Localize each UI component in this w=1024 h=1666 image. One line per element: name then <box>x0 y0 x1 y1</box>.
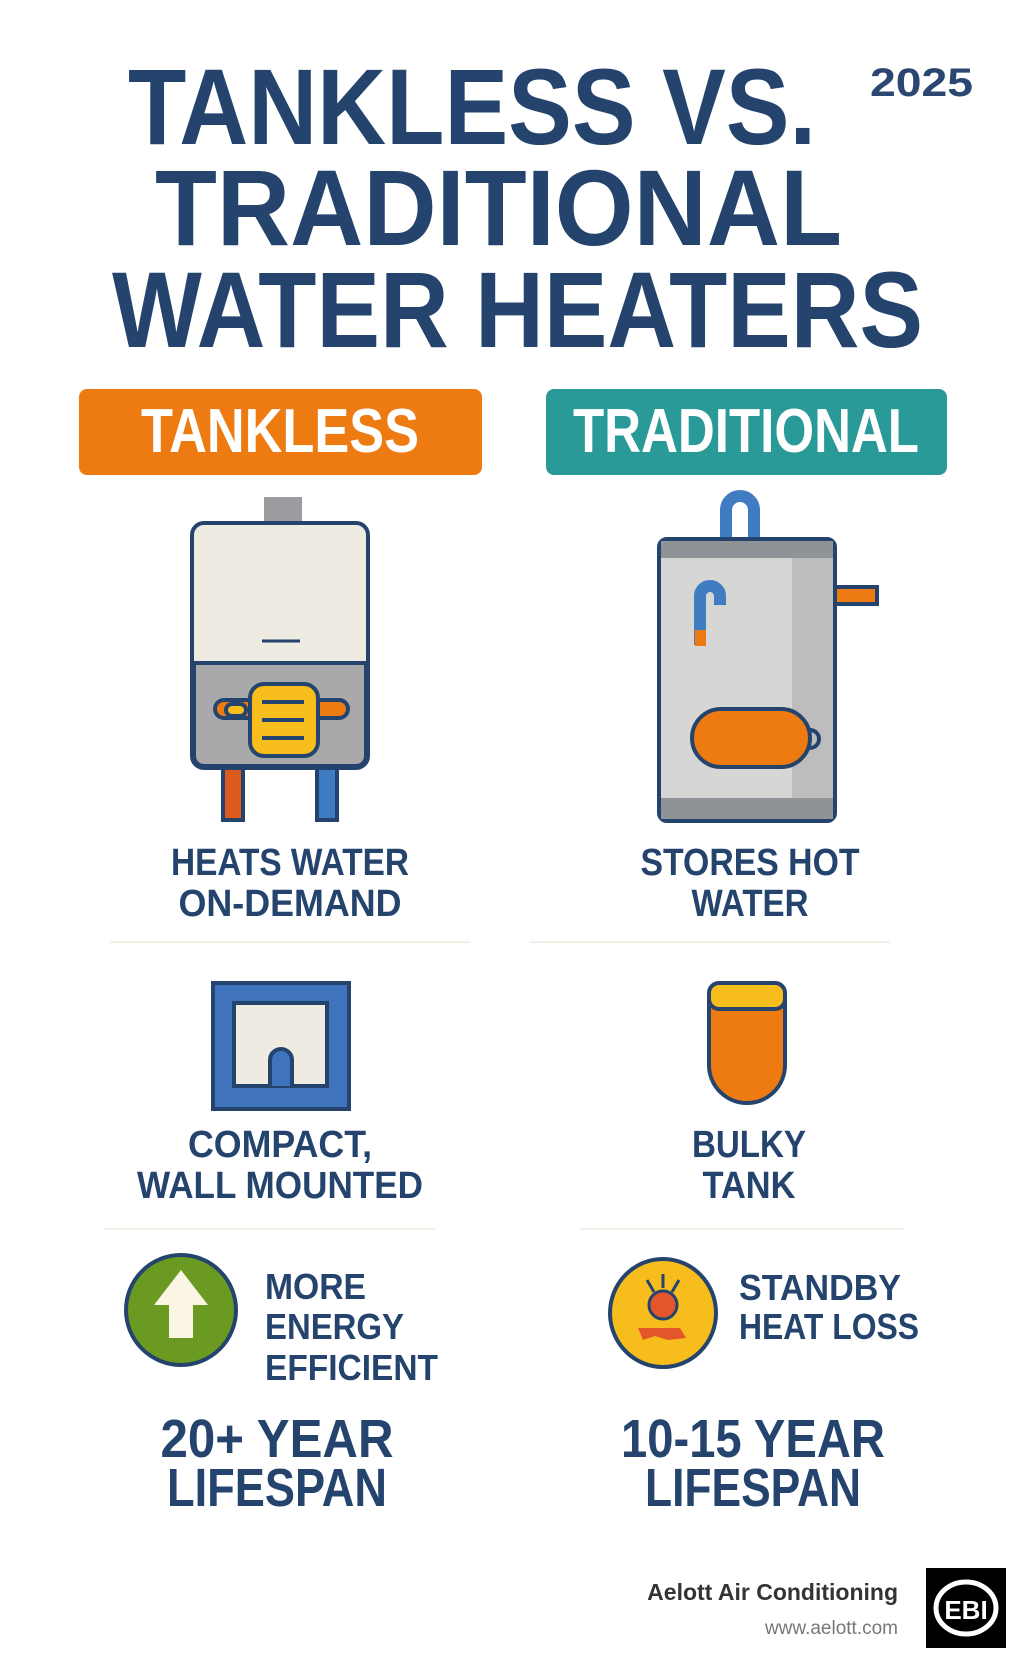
title: WATER HEATERS <box>112 249 923 370</box>
text: heats water on-demand <box>171 842 409 925</box>
footer: company name: Aelott Air Conditioning <box>647 1579 898 1605</box>
text: more energy efficient: MORE <box>265 1266 366 1307</box>
title: TRADITIONAL <box>155 147 842 268</box>
banner: traditional <box>546 389 947 475</box>
text: more energy efficient: ENERGY <box>265 1306 404 1347</box>
text: 20+ year lifespan: 20+ YEAR <box>160 1409 394 1469</box>
text: more energy efficient: EFFICIENT <box>265 1347 438 1388</box>
title: TANKLESS VS. <box>128 46 816 167</box>
text: heats water on-demand: ON-DEMAND <box>178 883 402 925</box>
text: bulky tank <box>692 1124 806 1207</box>
text: heats water on-demand: HEATS WATER <box>171 842 409 884</box>
banner: tankless <box>79 389 482 475</box>
icon: tankless heater <box>192 497 368 820</box>
text: compact wall mounted <box>137 1124 423 1207</box>
footer: company name: www.aelott.com <box>764 1618 898 1639</box>
text: more energy efficient <box>265 1266 438 1388</box>
text: stores hot water <box>640 842 860 925</box>
text: 10-15 year lifespan: LIFESPAN <box>645 1458 861 1518</box>
banner: tankless: TANKLESS <box>141 397 419 466</box>
text: 10-15 year lifespan <box>621 1409 885 1518</box>
year label: 2025 <box>870 61 973 105</box>
logo <box>926 1568 1006 1648</box>
icon: bulky tank <box>709 983 785 1103</box>
text: 10-15 year lifespan: 10-15 YEAR <box>621 1409 885 1469</box>
text: bulky tank: TANK <box>702 1165 796 1207</box>
logo: EBI <box>944 1595 988 1625</box>
text: compact wall mounted: WALL MOUNTED <box>137 1165 423 1207</box>
banner: traditional: TRADITIONAL <box>573 397 919 466</box>
footer: company name <box>647 1579 898 1639</box>
title <box>112 46 923 370</box>
icon: green up arrow <box>126 1255 236 1365</box>
text: standby heat loss <box>739 1267 919 1347</box>
text: bulky tank: BULKY <box>692 1124 806 1166</box>
text: stores hot water: WATER <box>692 883 808 925</box>
text: 20+ year lifespan: LIFESPAN <box>167 1458 387 1518</box>
text: stores hot water: STORES HOT <box>640 842 860 884</box>
text: standby heat loss: STANDBY <box>739 1267 901 1308</box>
text: 20+ year lifespan <box>160 1409 394 1518</box>
text: standby heat loss: HEAT LOSS <box>739 1306 919 1347</box>
icon: traditional tank <box>659 496 877 821</box>
text: compact wall mounted: COMPACT, <box>188 1124 372 1166</box>
icon: wall-mounted unit <box>213 983 349 1109</box>
icon: standby heat loss <box>610 1259 716 1367</box>
